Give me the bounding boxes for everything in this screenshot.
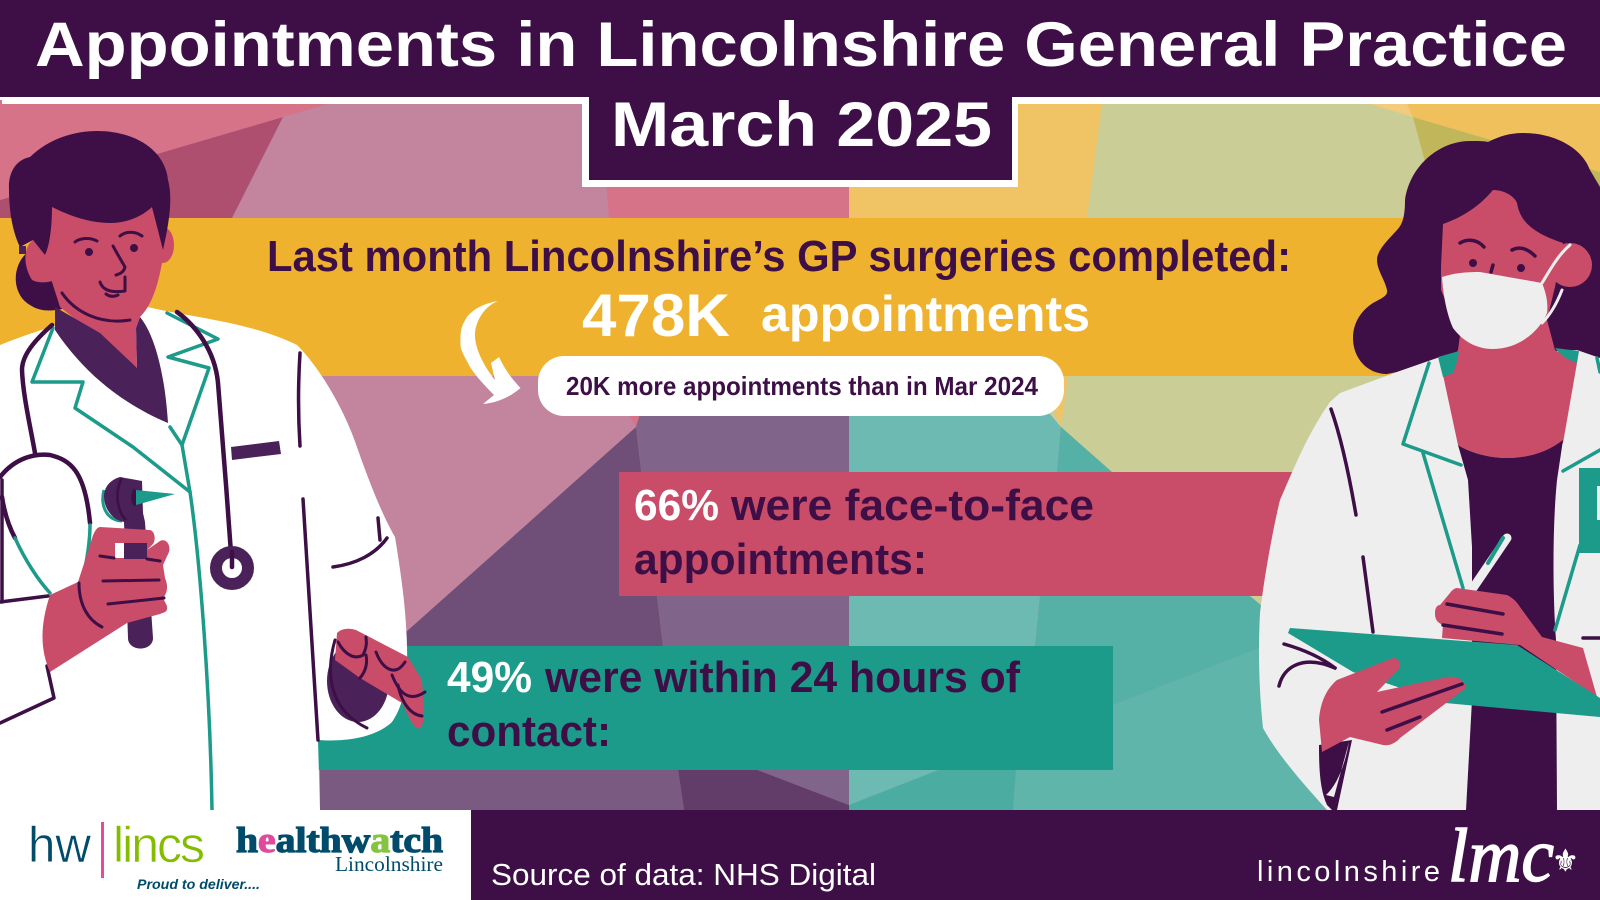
nurse lapels xyxy=(1403,358,1600,630)
subtitle: date: March 2025 xyxy=(611,90,992,160)
stat text: face-to-face: appointments: xyxy=(634,535,927,584)
nurse mask straps xyxy=(1542,245,1570,323)
stethoscope chestpiece xyxy=(216,552,248,584)
doctor pocket hand xyxy=(335,629,424,728)
pill: comparison xyxy=(538,356,1064,416)
stat: 478K: 478K xyxy=(582,282,730,349)
band: completed appointments xyxy=(0,218,1600,376)
stethoscope tube teal xyxy=(15,525,90,593)
stat text: within 24 hours: contact: xyxy=(447,707,611,756)
footer bar xyxy=(471,810,1600,900)
nurse coat lines xyxy=(1331,409,1600,638)
stat label: appointments: appointments xyxy=(761,286,1090,342)
doctor facial eyes xyxy=(85,244,138,256)
nurse left hand xyxy=(1319,658,1466,752)
doctor pocket hand: dark oval xyxy=(327,640,389,722)
band: face-to-face xyxy=(619,472,1299,596)
doctor pocket pen xyxy=(231,441,281,460)
doctor face and neck xyxy=(45,205,162,368)
nurse hand lines xyxy=(1382,604,1503,730)
doctor coat marks xyxy=(0,353,387,740)
otoscope xyxy=(103,477,175,648)
heading: completed: Last month Lincolnshire’s GP surgeries completed: xyxy=(267,232,1291,281)
logo: healthwatch Lincolnshire: Lincolnshire xyxy=(335,852,443,876)
logo: hw lincs xyxy=(28,817,260,892)
doctor pocket hand lines xyxy=(330,637,425,728)
nurse ear xyxy=(1548,243,1592,287)
nurse collar teal xyxy=(1438,348,1579,377)
nurse mask xyxy=(1442,272,1547,349)
subtitle box xyxy=(582,90,1018,187)
stat text: within 24 hours: 49% xyxy=(447,653,532,702)
band: within 24 hours xyxy=(300,646,1113,770)
header bar xyxy=(0,0,1600,97)
doctor lapels xyxy=(32,313,218,810)
logo: lincolnshire lmc: lincolnshire xyxy=(1257,856,1440,888)
doctor ears xyxy=(25,227,174,282)
nurse sleeve folds xyxy=(1279,644,1335,686)
nurse face features xyxy=(1460,240,1535,272)
background: faceted colour panels xyxy=(0,100,1600,820)
logo: healthwatch Lincolnshire: healthwatch xyxy=(236,820,443,860)
nurse coat xyxy=(1259,350,1600,810)
doctor collar xyxy=(55,307,168,423)
nurse sleeve xyxy=(1319,740,1352,810)
logo: hw lincs: Proud to deliver.... xyxy=(137,876,260,892)
doctor finger lines xyxy=(79,556,164,627)
logo: hw lincs: hw xyxy=(28,817,92,873)
source note: Source of data: NHS Digital xyxy=(491,857,876,892)
illustration: nurse xyxy=(1259,133,1600,810)
logo: lincolnshire lmc: ⚜ xyxy=(1552,844,1579,879)
pill text: 20K more appointments than in Mar 2024 xyxy=(566,371,1038,401)
nurse hair xyxy=(1353,133,1600,374)
nurse badge xyxy=(1579,468,1600,553)
doctor coat xyxy=(0,307,407,810)
logo: lincolnshire lmc xyxy=(1257,814,1579,898)
nurse right hand xyxy=(1435,588,1597,697)
title: Appointments in Lincolnshire General Practice xyxy=(35,10,1567,80)
doctor bun xyxy=(16,250,62,310)
footer logos panel xyxy=(0,810,471,900)
nurse clipboard xyxy=(1288,628,1600,717)
stat text: within 24 hours: were within 24 hours of xyxy=(544,653,1020,702)
illustration: doctor xyxy=(0,131,425,810)
arrow: curved down to pill xyxy=(460,301,520,404)
doctor stethoscope xyxy=(0,312,232,567)
hand gap xyxy=(115,543,147,559)
doctor facial features xyxy=(62,232,142,321)
stat text: face-to-face: 66% xyxy=(634,481,719,530)
stat text: face-to-face: were face-to-face xyxy=(730,481,1094,530)
logo: hw lincs: lincs xyxy=(113,817,205,873)
logo: healthwatch Lincolnshire xyxy=(236,820,443,876)
doctor hair tie xyxy=(19,246,26,254)
nurse chest xyxy=(1443,350,1577,458)
nurse pen xyxy=(1473,538,1507,588)
nurse face xyxy=(1441,190,1563,350)
nurse shirt xyxy=(1458,440,1563,810)
doctor hair xyxy=(9,131,170,255)
nurse eyes xyxy=(1469,259,1525,272)
doctor right hand xyxy=(42,527,169,672)
logo: lincolnshire lmc: lmc xyxy=(1448,814,1554,898)
header rule xyxy=(2,97,1600,104)
